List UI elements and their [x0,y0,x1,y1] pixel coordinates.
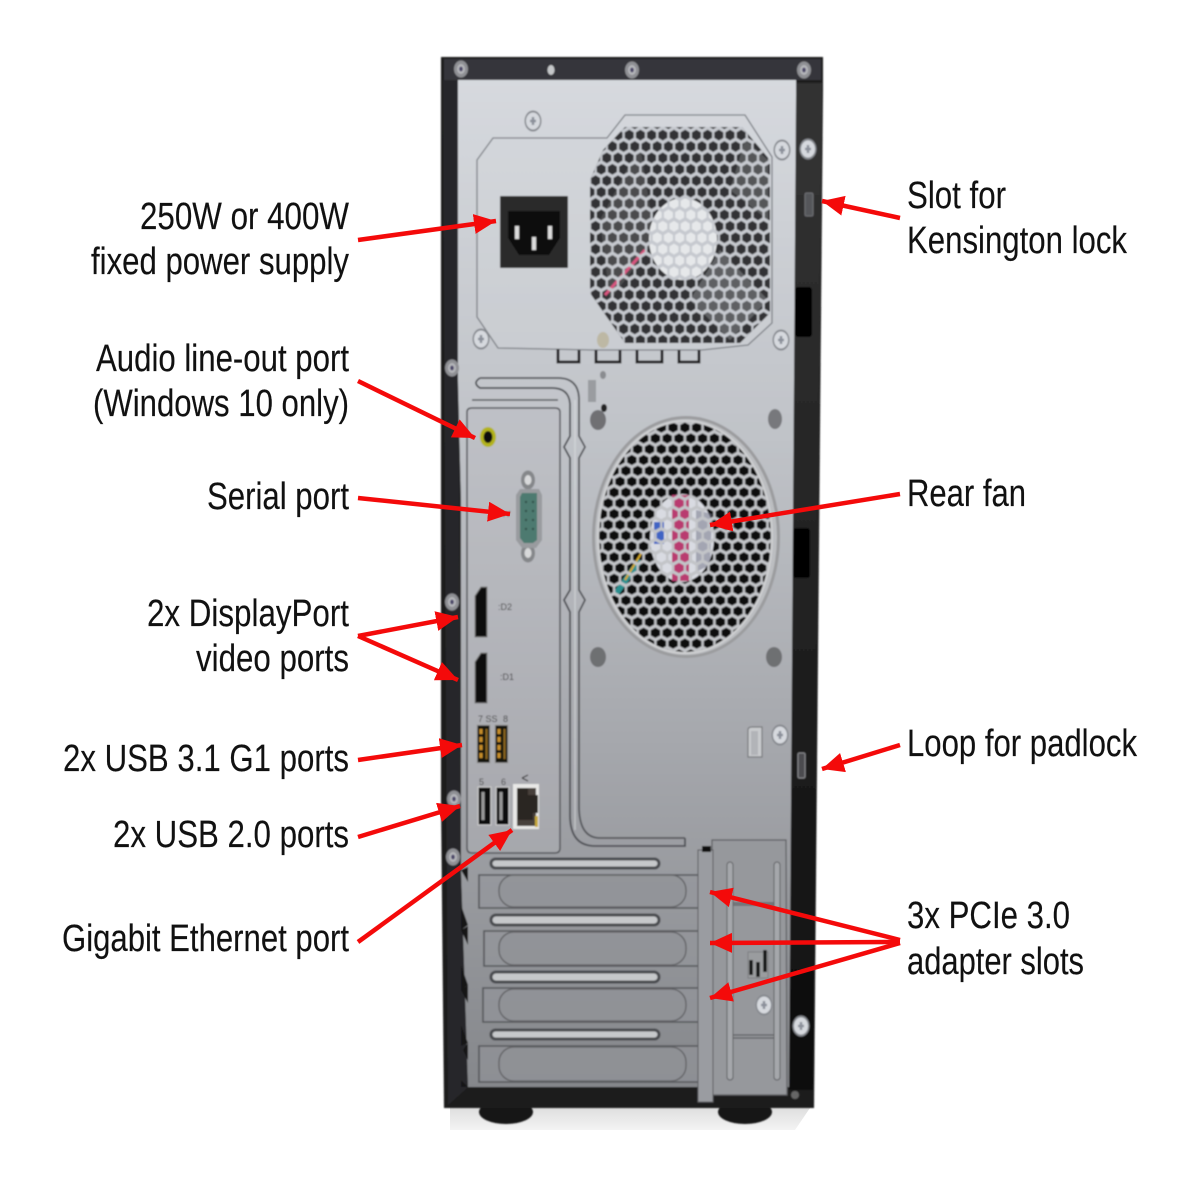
arrow: rear fan [710,494,900,525]
chassis frame [441,57,823,1108]
label: audio port [93,338,349,425]
icon: USB 2.0 ports [478,777,509,825]
arrow: audio port [358,381,475,438]
label: USB 3.1: 2x USB 3.1 G1 ports [63,738,349,780]
PCIe retention bracket [698,840,799,1102]
icon: audio jack [480,427,496,447]
right side strip [789,83,822,1090]
icon: serial port [502,470,542,562]
label: audio port: Audio line-out port [96,338,349,380]
label: DisplayPort [147,593,349,680]
label: rear fan: Rear fan [907,473,1026,515]
fan blades seen through vent [600,145,655,300]
label: audio port: (Windows 10 only) [93,383,349,425]
label: serial port: Serial port [207,476,349,518]
PCIe slot covers [461,859,698,1087]
arrows: DisplayPort [358,617,458,680]
side strip tabs [793,287,812,578]
DisplayPort port labels: :D1 [500,672,514,682]
floor shadow [450,1105,812,1130]
arrow: Ethernet [358,830,512,942]
label: power supply: 250W or 400W [140,196,349,238]
I/O plate [467,400,560,853]
power supply slots [558,349,699,362]
padlock slot on side strip [798,753,805,778]
rear fan grill [592,416,780,658]
label: padlock: Loop for padlock [907,723,1138,765]
label: Kensington lock [907,175,1128,262]
rear metal panel [458,80,796,1087]
icon: power socket [500,196,568,268]
label: DisplayPort: 2x DisplayPort [147,593,349,635]
slot plates [479,875,698,1082]
icon: Ethernet port [513,775,539,829]
DisplayPort port labels [498,602,514,682]
top frame bar [444,59,821,80]
label: power supply: fixed power supply [91,241,349,283]
icon: USB 3.1 ports [477,714,508,763]
arrow: power supply [358,221,496,240]
arrows: PCIe slots [710,892,900,998]
DisplayPort port labels: :D2 [498,602,512,612]
label: Ethernet: Gigabit Ethernet port [62,918,349,960]
label: PCIe slots [907,895,1084,983]
left side strip [443,80,468,1105]
label: PCIe slots: 3x PCIe 3.0 [907,895,1070,937]
arrow: USB 2.0 [358,806,460,837]
arrow: Kensington lock [822,201,900,218]
power supply outline [477,115,772,350]
icon: USB 3.1 ports: 7 SS [478,714,498,724]
icon: USB 2.0 ports: 6 [501,777,506,787]
power supply vent [590,127,770,343]
arrow: serial port [358,498,510,514]
label: power supply [91,196,349,283]
arrow: USB 3.1 [358,745,462,760]
icon: DisplayPort connectors [475,587,487,703]
label: PCIe slots: adapter slots [907,941,1084,983]
icon: USB 3.1 ports: 8 [503,714,508,724]
Kensington lock slot [805,193,813,216]
label: Kensington lock: Slot for [907,175,1006,217]
arrow: padlock loop [822,745,900,769]
left teeth [461,867,468,1087]
screws [445,60,816,1036]
tower rear view [441,57,823,1124]
icon: USB 2.0 ports: 5 [479,777,484,787]
label: USB 2.0: 2x USB 2.0 ports [113,814,349,856]
label: Kensington lock: Kensington lock [907,220,1128,262]
slot vent bars [491,859,659,1039]
label: DisplayPort: video ports [196,638,349,680]
channel lines [476,378,685,846]
plate recesses [499,875,686,1081]
icon: tower feet [479,1100,772,1124]
fan hub sticker [650,494,714,582]
padlock loop [748,727,762,757]
